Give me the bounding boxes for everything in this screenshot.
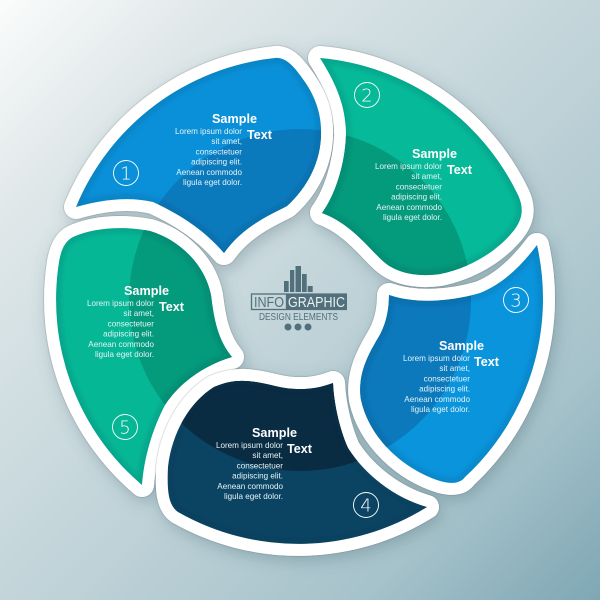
number 1	[114, 160, 138, 186]
text block 2: Lorem ipsum dolor	[375, 162, 442, 171]
text block 5: sit amet,	[123, 309, 154, 318]
text block 1: consectetuer	[196, 147, 242, 156]
text block 4: ligula eget dolor.	[224, 492, 283, 501]
text block 1: ligula eget dolor.	[183, 178, 242, 187]
text block 5: Aenean commodo	[88, 340, 154, 349]
text block 3: Sample	[439, 338, 484, 353]
text block 1: sit amet,	[211, 137, 242, 146]
center logo	[252, 266, 347, 330]
text block 4: Lorem ipsum dolor	[216, 441, 283, 450]
number 5	[112, 414, 138, 440]
text block 5: adipiscing elit.	[103, 330, 154, 339]
text block 1: Text	[247, 127, 273, 142]
text block 3: adipiscing elit.	[419, 385, 470, 394]
text block 5: Lorem ipsum dolor	[87, 299, 154, 308]
text block 4: sit amet,	[252, 451, 283, 460]
number 5: 5	[119, 418, 131, 438]
logo wordmark	[252, 293, 347, 311]
text block 4: Aenean commodo	[217, 482, 283, 491]
text block 2: adipiscing elit.	[391, 193, 442, 202]
text block 5: Sample	[124, 283, 169, 298]
text block 3: Aenean commodo	[404, 395, 470, 404]
logo subtitle: DESIGN ELEMENTS	[259, 312, 338, 323]
text block 2: Text	[447, 162, 473, 177]
text block 2: ligula eget dolor.	[383, 213, 442, 222]
number 1: 1	[120, 164, 132, 184]
number 2: 2	[361, 86, 373, 106]
text block 2: consectetuer	[396, 182, 442, 191]
text block 1: Aenean commodo	[176, 168, 242, 177]
text block 3	[403, 338, 500, 414]
text block 3: Lorem ipsum dolor	[403, 354, 470, 363]
number 4: 4	[360, 496, 372, 516]
panel: segment 1	[63, 45, 334, 266]
text block 3: ligula eget dolor.	[411, 405, 470, 414]
text block 4	[216, 425, 313, 501]
number 3	[504, 288, 528, 312]
panel: segment 2	[307, 45, 534, 288]
text block 2: Sample	[412, 146, 457, 161]
text block 5: ligula eget dolor.	[95, 350, 154, 359]
text block 5	[87, 283, 185, 359]
text block 4: adipiscing elit.	[232, 472, 283, 481]
text block 4: Sample	[252, 425, 297, 440]
logo wordmark: INFO	[254, 294, 284, 311]
text block 3: consectetuer	[424, 374, 470, 383]
panel: segment 4	[154, 368, 440, 556]
text block 4: consectetuer	[237, 461, 283, 470]
text block 5: Text	[159, 299, 185, 314]
text block 1: Sample	[212, 111, 257, 126]
text block 4: Text	[287, 441, 313, 456]
text block 1	[175, 111, 273, 187]
number 3: 3	[510, 290, 522, 312]
soft shadow of the ring	[56, 58, 543, 544]
text block 1: adipiscing elit.	[191, 158, 242, 167]
number 4	[354, 492, 378, 518]
number 2	[354, 82, 380, 108]
three dots	[284, 324, 312, 330]
text block 2: Aenean commodo	[376, 203, 442, 212]
panel: segment 3	[348, 232, 556, 496]
text block 3: sit amet,	[439, 364, 470, 373]
text block 3: Text	[474, 354, 500, 369]
text block 1: Lorem ipsum dolor	[175, 127, 242, 136]
text block 5: consectetuer	[108, 319, 154, 328]
text block 2: sit amet,	[411, 172, 442, 181]
panel: segment 5	[43, 215, 245, 498]
logo wordmark: GRAPHIC	[288, 294, 345, 311]
text block 2	[375, 146, 473, 222]
icon: bar chart	[284, 266, 313, 292]
